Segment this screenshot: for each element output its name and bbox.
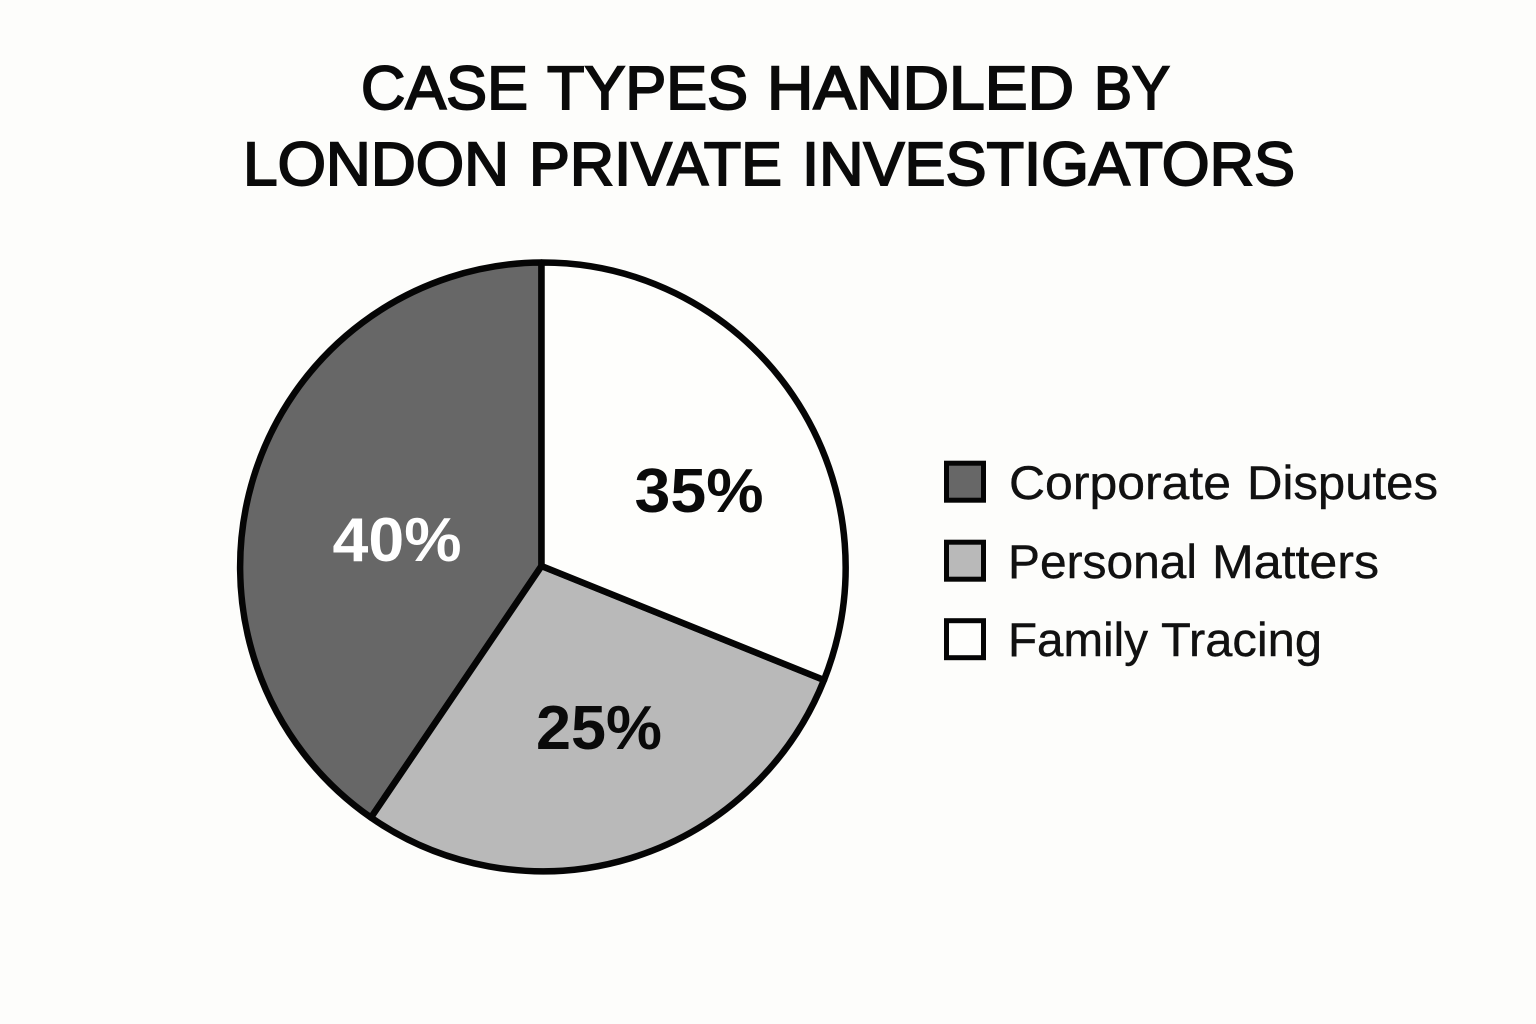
legend item: Personal Matters: Personal	[1008, 535, 1197, 588]
title: LONDON	[243, 130, 509, 198]
title: HANDLED	[767, 54, 1074, 122]
slice: Personal Matters 25%	[371, 566, 824, 871]
legend item: Corporate Disputes: Disputes	[1247, 456, 1438, 509]
slice: Corporate Disputes 40%	[240, 262, 542, 818]
legend item: Personal Matters: Matters	[1212, 535, 1379, 588]
legend item: Personal Matters	[946, 535, 1379, 588]
label: 35%: 35%	[634, 457, 764, 526]
title	[243, 54, 1295, 198]
legend item: Family Tracing: Tracing	[1161, 613, 1322, 666]
title: TYPES	[547, 54, 748, 122]
title: CASE	[361, 54, 528, 122]
legend item: Family Tracing	[946, 613, 1322, 666]
pie chart	[240, 262, 846, 871]
label: 25%: 25%	[536, 694, 662, 763]
title: INVESTIGATORS	[802, 130, 1295, 198]
slice: Family Tracing 35%	[542, 262, 846, 680]
legend item: Corporate Disputes: Corporate	[1009, 456, 1231, 509]
label: 40%: 40%	[332, 506, 462, 575]
title: BY	[1094, 54, 1170, 122]
legend	[946, 456, 1438, 666]
title: PRIVATE	[529, 130, 782, 198]
legend item: Family Tracing: Family	[1008, 613, 1148, 666]
legend item: Corporate Disputes	[946, 456, 1438, 509]
